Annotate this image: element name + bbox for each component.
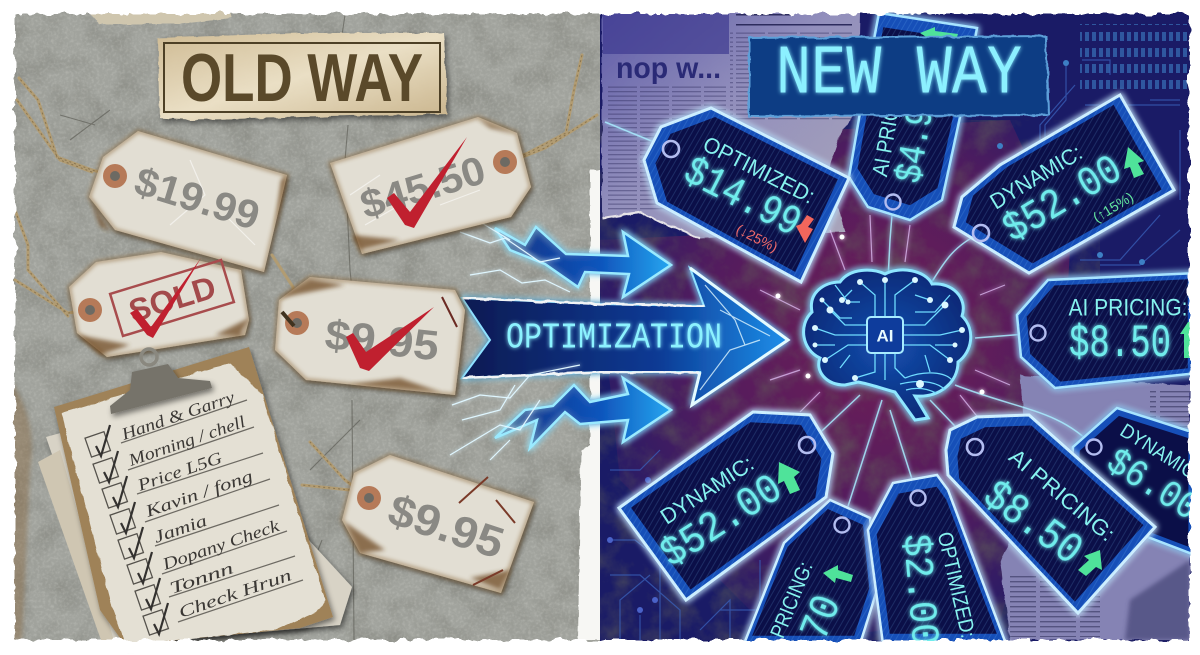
tag: AI pricing $8.50 bottom right (946, 415, 1155, 613)
tag: AI pricing top (behind heading): $4.99 (889, 85, 947, 187)
tag: AI pricing right (1017, 273, 1198, 388)
icon: AI brain (804, 270, 971, 420)
red check (346, 307, 434, 371)
back papers (46, 400, 352, 645)
price tag: $19.99: $19.99 (129, 159, 265, 239)
red check (130, 258, 201, 338)
tag: dynamic $52.00 bottom left (619, 412, 833, 600)
checklist rows: Price L5G (134, 448, 225, 495)
tag: optimized bottom (868, 475, 1006, 648)
panel: old way background (10, 10, 602, 645)
checklist rows: Hand & Garry (118, 387, 237, 444)
checklist rows: Kavin / fong (142, 466, 255, 521)
tag: optimized $14.99 (644, 108, 849, 282)
tag: optimized bottom: OPTIMIZED: (933, 530, 979, 640)
checklist rows: Morning / chell (125, 412, 248, 470)
price tag: $9.95 plain (302, 442, 534, 593)
checklist rows: Tonnn (167, 558, 236, 598)
checklist rows: Jamia (151, 511, 209, 547)
AI chip: AI (876, 326, 894, 346)
newspaper top left (602, 12, 860, 238)
clip (110, 349, 212, 414)
checklist rows: Dopany Check (159, 516, 282, 574)
upper lightning arrow (460, 222, 671, 297)
lower lightning arrow (450, 365, 671, 460)
newspaper top left: nop w... (616, 52, 721, 85)
brain nodes (812, 277, 965, 388)
tag: AI pricing bottom: PRICING: (766, 559, 818, 641)
tag: dynamic far right (1070, 408, 1200, 555)
heading: old way: OLD WAY (181, 40, 423, 116)
tag string (17, 78, 114, 176)
sold stamp: SOLD (125, 269, 220, 329)
tag: AI pricing $8.50 bottom right: $8.50 (973, 471, 1091, 577)
tag: optimized $14.99: OPTIMIZED: (699, 131, 819, 209)
tag string (15, 210, 90, 316)
tag: dynamic $52.00 top: DYNAMIC: (985, 140, 1087, 214)
brain circuit traces (815, 280, 962, 393)
newspaper bottom right (1000, 375, 1190, 640)
tag string (505, 55, 597, 162)
price tag: SOLD (15, 210, 249, 357)
price tag: $9.95 plain: $9.95 (382, 485, 510, 569)
price tag: $9.95 checked (272, 255, 465, 395)
circuit traces bottom left (607, 450, 760, 640)
board (54, 347, 333, 645)
tag: optimized bottom: $2.00 (891, 532, 945, 648)
circuit traces top right (997, 24, 1188, 265)
tag: AI pricing top (behind heading): AI PRICING: (867, 66, 911, 178)
checklist rows: Check Hrun (176, 565, 294, 622)
red check (387, 137, 467, 228)
tag: dynamic $52.00 top (954, 95, 1174, 273)
tag: optimized $14.99: (↓25%) (734, 221, 780, 255)
tag: dynamic $52.00 bottom left: $52.00 (652, 465, 792, 579)
price tag: $19.99 (17, 78, 287, 272)
tag: AI pricing top (behind heading) (849, 13, 977, 220)
optimization arrow (462, 268, 788, 405)
white torn seam (578, 170, 606, 640)
tag string (272, 255, 295, 322)
checklist rows (85, 387, 303, 635)
tag: AI pricing bottom (744, 500, 877, 647)
panel: new way background (600, 10, 1200, 648)
tag: AI pricing $8.50 bottom right: AI PRICING: (1004, 444, 1120, 546)
optimization arrow: OPTIMIZATION (506, 318, 722, 358)
tag: dynamic $52.00 top: $52.00 (995, 146, 1131, 254)
paper (61, 363, 325, 645)
tag string (302, 442, 369, 498)
clipboard checklist (38, 347, 352, 645)
sold stamp (110, 260, 234, 336)
price tag: $9.95 checked: $9.95 (323, 311, 441, 369)
AI chip (867, 317, 903, 353)
heading: new way: NEW WAY (776, 36, 1022, 114)
tag: AI pricing bottom: 70 (792, 589, 852, 647)
tag: dynamic $52.00 top: (↑15%) (1090, 189, 1136, 225)
maroon centre (600, 120, 1070, 640)
connector wires and rays (605, 122, 1094, 525)
tag: dynamic $52.00 bottom left: DYNAMIC: (656, 451, 758, 529)
price tag: $45.50 (330, 55, 597, 254)
price tag: $45.50: $45.50 (355, 148, 491, 228)
tag: optimized $14.99: $14.99 (675, 148, 809, 248)
torn white edge of newspaper (602, 212, 700, 238)
